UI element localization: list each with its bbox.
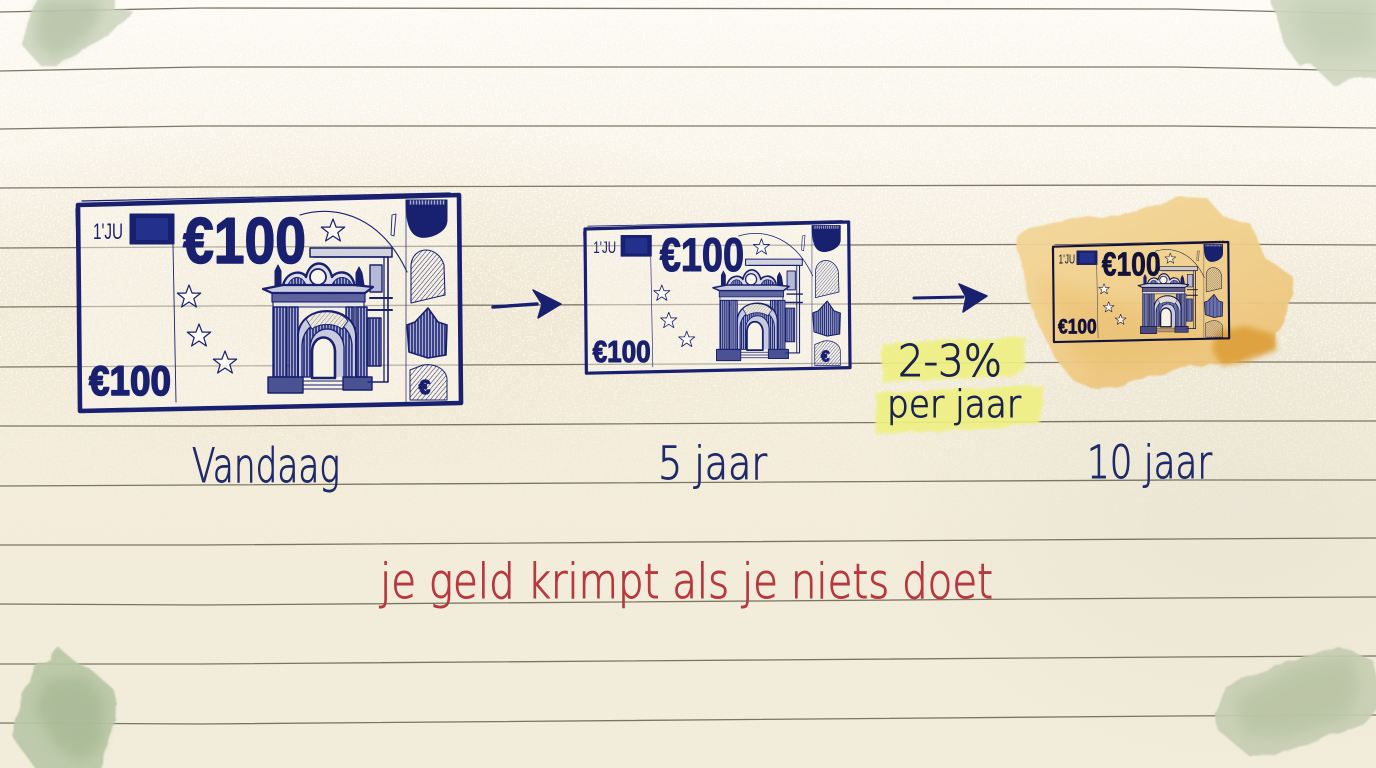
bill value small: €100 bbox=[593, 335, 651, 369]
conclusion line in red: je geld krimpt als je niets doet bbox=[379, 554, 993, 610]
arrow: 5 to 10 years bbox=[914, 284, 987, 312]
watercolor: top-left green bbox=[20, 0, 132, 67]
watercolor: bottom-left green bbox=[13, 647, 117, 768]
rate value: 2-3% bbox=[898, 336, 1002, 387]
watercolor: orange stain behind third bill bbox=[1017, 197, 1293, 390]
bill label small text: 1'JU bbox=[1059, 251, 1075, 266]
label: 10 jaar: 10 jaar bbox=[1087, 436, 1212, 489]
paper background bbox=[0, 0, 1376, 532]
watercolor: bottom-right green bbox=[1213, 647, 1376, 756]
bill value large: €100 bbox=[183, 204, 306, 277]
bill paper bbox=[78, 195, 461, 411]
bill: Vandaag (largest) bbox=[76, 193, 461, 411]
bill value small: €100 bbox=[89, 357, 171, 404]
bill: 5 jaar (medium) bbox=[584, 221, 850, 373]
bill value large: €100 bbox=[1102, 246, 1161, 283]
yellow marker strokes bbox=[876, 337, 1043, 434]
label: Vandaag: Vandaag bbox=[192, 439, 340, 494]
highlight callout: 2-3% per jaar bbox=[876, 336, 1043, 434]
bill label small text: 1'JU bbox=[593, 238, 616, 257]
euro sign on bill: € bbox=[419, 377, 430, 399]
label: 5 jaar: 5 jaar bbox=[658, 437, 767, 490]
euro sign on bill: € bbox=[821, 348, 830, 365]
bill: 10 jaar (smallest) bbox=[1052, 241, 1229, 342]
bill paper bbox=[585, 222, 850, 373]
bill label small text: 1'JU bbox=[93, 219, 123, 244]
bill value large: €100 bbox=[660, 229, 744, 282]
arrow: today to 5 years bbox=[493, 290, 561, 318]
watercolor: top-right green bbox=[1269, 0, 1376, 88]
rate period: per jaar bbox=[887, 383, 1022, 426]
bill value small: €100 bbox=[1058, 316, 1097, 339]
